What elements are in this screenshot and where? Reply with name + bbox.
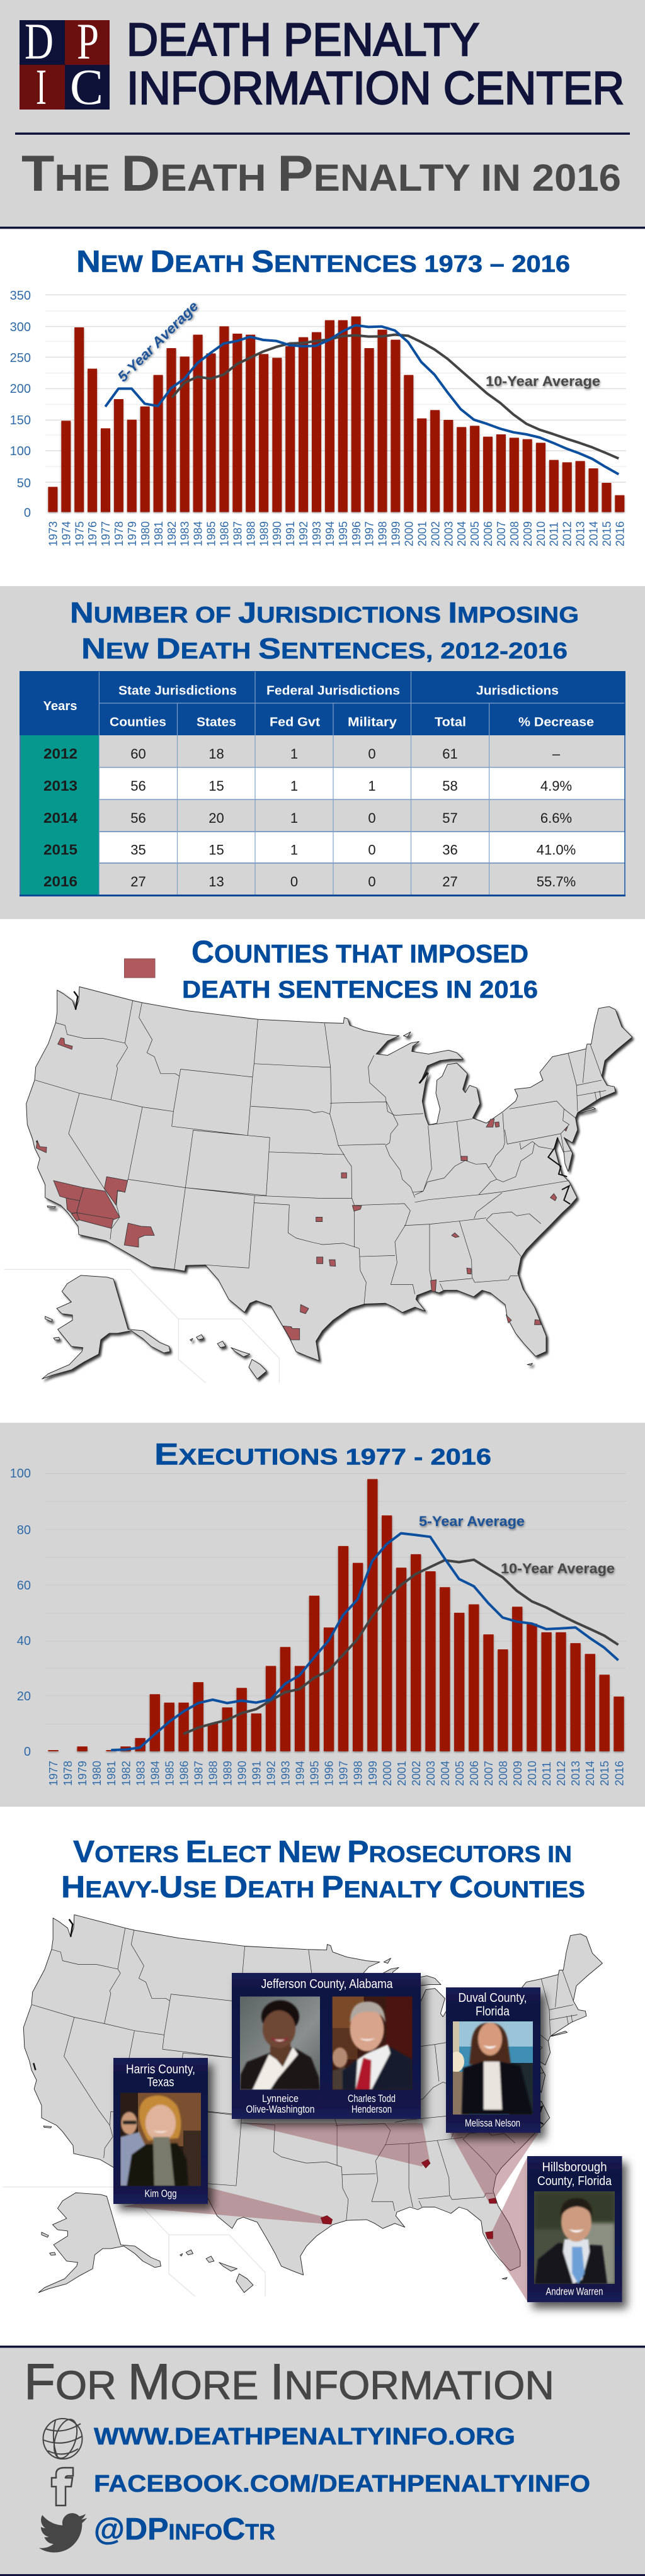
header divider [15, 132, 630, 135]
card: Harris County: Texas [147, 2076, 174, 2089]
x axis year labels: 2010 [535, 521, 547, 546]
table header labels: Total [435, 715, 466, 729]
main title: THE DEATH PENALTY IN 2016 [21, 145, 621, 202]
chart 2 bars [48, 1479, 624, 1751]
x axis year labels: 1999 [390, 521, 402, 546]
x axis year labels: 1988 [244, 521, 257, 546]
label: 5-year average: 5-Year Average [419, 1513, 525, 1529]
row 2014: 2014 [43, 810, 77, 826]
y axis labels: 50 [17, 477, 31, 490]
row 2012: 2012 [43, 745, 77, 762]
x axis year labels: 2005 [454, 1761, 466, 1786]
x axis year labels: 2010 [526, 1761, 539, 1786]
table heading [70, 596, 579, 665]
x axis year labels: 1996 [323, 1761, 336, 1786]
x axis year labels: 2014 [584, 1761, 596, 1786]
card: Duval County [446, 1987, 540, 2133]
organization name [127, 14, 624, 114]
prosecutors heading [61, 1835, 585, 1904]
x axis year labels: 1982 [166, 521, 178, 546]
chart title: EXECUTIONS 1977 - 2016 [154, 1438, 491, 1472]
y axis labels: 0 [24, 506, 31, 520]
row 2013: 4.9% [540, 778, 572, 794]
card: Jefferson County: Charles Todd [348, 2093, 396, 2104]
logo: DPIC: P [77, 13, 99, 70]
logo: DPIC: D [25, 13, 54, 70]
y axis labels [10, 289, 31, 520]
link: website: WWW.DEATHPENALTYINFO.ORG [94, 2424, 515, 2450]
connector: Harris [123, 2188, 329, 2224]
row 2014: 0 [368, 810, 376, 826]
table header labels: Federal Jurisdictions [266, 684, 400, 698]
table header labels: Military [348, 715, 397, 729]
x axis year labels: 1982 [120, 1761, 132, 1786]
table grid [99, 672, 625, 895]
panel: jurisdictions table section [0, 586, 645, 919]
chart 2 plot [45, 1474, 626, 1751]
table border [20, 671, 625, 896]
footer heading: FOR MORE INFORMATION [24, 2354, 554, 2410]
table header labels: % Decrease [518, 715, 594, 729]
table header labels: Jurisdictions [476, 684, 559, 698]
table header labels: Counties [110, 715, 166, 729]
x axis year labels: 2003 [425, 1761, 437, 1786]
y axis labels: 40 [17, 1634, 31, 1648]
footer bottom rule [0, 2574, 645, 2576]
y axis labels: 300 [10, 320, 31, 334]
x axis year labels: 2000 [381, 1761, 394, 1786]
table header labels: State Jurisdictions [118, 684, 237, 698]
x axis year labels: 1984 [192, 521, 205, 546]
panel: footer [0, 2346, 645, 2576]
chart 2 gridlines [45, 1474, 626, 1724]
row 2016: 55.7% [537, 874, 576, 890]
row 2012: 61 [442, 746, 458, 762]
x axis year labels: 2016 [613, 1761, 625, 1786]
x axis year labels: 1974 [60, 521, 72, 546]
row 2013: 1 [368, 778, 376, 794]
connector: Jefferson [243, 2123, 430, 2166]
x axis year labels: 2008 [497, 1761, 510, 1786]
panel: counties map [4, 934, 632, 1383]
x axis year labels: 1996 [350, 521, 363, 546]
county marker: Jefferson [421, 2159, 430, 2168]
card: Hillsborough County: Andrew Warren [545, 2285, 603, 2298]
organization name: INFORMATION CENTER [127, 63, 624, 114]
x axis year labels: 2000 [403, 521, 416, 546]
footer top rule [0, 2346, 645, 2348]
table heading: NEW DEATH SENTENCES, 2012-2016 [81, 632, 568, 665]
x axis year labels: 1981 [152, 521, 165, 546]
row 2012: 18 [208, 746, 224, 762]
logo: DPIC [20, 13, 110, 115]
x axis year labels: 1993 [280, 1761, 292, 1786]
row 2016: 2016 [43, 873, 77, 890]
logo: DPIC: C [70, 60, 103, 115]
x axis year labels: 1995 [309, 1761, 321, 1786]
x axis year labels: 1999 [367, 1761, 379, 1786]
row 2014: 20 [208, 810, 224, 826]
row 2012: – [552, 746, 561, 762]
row 2015: 36 [442, 842, 458, 857]
x axis year labels: 2001 [396, 1761, 408, 1786]
prosecutors heading: HEAVY-USE DEATH PENALTY COUNTIES [61, 1870, 585, 1904]
row 2013: 15 [208, 778, 224, 794]
chart 1 plot [45, 295, 626, 512]
x axis year labels: 2009 [511, 1761, 524, 1786]
row 2012 [43, 745, 561, 762]
table header labels [43, 684, 594, 729]
prosecutors heading: VOTERS ELECT NEW PROSECUTORS IN [73, 1835, 572, 1869]
icon: twitter bird [39, 2513, 87, 2553]
panel: executions chart [0, 1423, 645, 1807]
map of prosecutors counties [3, 1915, 602, 2296]
counties highlighted east [329, 1119, 568, 1325]
row 2015: 41.0% [537, 842, 576, 857]
x axis year labels: 2013 [569, 1761, 582, 1786]
x axis year labels: 1978 [62, 1761, 74, 1786]
x axis year labels: 1997 [338, 1761, 350, 1786]
x axis year labels: 1985 [205, 521, 218, 546]
row 2012: 0 [368, 746, 376, 762]
10-year average line [172, 335, 619, 458]
x axis year labels: 2009 [522, 521, 534, 546]
x axis year labels: 2006 [468, 1761, 481, 1786]
x axis year labels: 1991 [251, 1761, 263, 1786]
x axis year labels: 1993 [311, 521, 323, 546]
x axis year labels: 2008 [508, 521, 521, 546]
table header [20, 671, 625, 735]
row 2013: 56 [130, 778, 146, 794]
x axis year labels: 1984 [149, 1761, 161, 1786]
x axis year labels: 1977 [47, 1761, 60, 1786]
row 2016: 27 [442, 874, 458, 890]
card: Harris County: Harris County, [126, 2062, 195, 2076]
connectors and county markers [123, 2123, 539, 2302]
legend swatch [125, 959, 155, 978]
x axis year labels: 2003 [442, 521, 455, 546]
row 2015: 2015 [43, 841, 77, 857]
y axis labels: 100 [10, 1467, 31, 1481]
row 2012: 60 [130, 746, 146, 762]
x axis year labels: 2016 [614, 521, 626, 546]
x axis year labels: 1992 [297, 521, 310, 546]
x axis year labels: 2011 [548, 522, 561, 546]
icon: globe [43, 2417, 82, 2461]
y axis labels: 20 [17, 1690, 31, 1703]
x axis year labels: 1986 [178, 1761, 190, 1786]
x axis year labels: 2012 [555, 1761, 568, 1786]
state borders [4, 991, 606, 1383]
chart 1 gridlines [45, 295, 626, 482]
y axis labels: 250 [10, 351, 31, 365]
x axis year labels: 1994 [294, 1761, 307, 1786]
row 2015 [43, 841, 576, 857]
x axis year labels: 2015 [601, 521, 614, 546]
x axis year labels: 1989 [258, 521, 270, 546]
card: Jefferson County: Olive-Washington [246, 2103, 315, 2115]
y axis labels: 0 [24, 1745, 31, 1759]
y axis labels: 60 [17, 1579, 31, 1593]
logo: DPIC: I [36, 60, 47, 115]
card: Hillsborough County: Hillsborough [542, 2161, 607, 2174]
section background [0, 1423, 645, 1807]
x axis year labels: 2004 [439, 1761, 452, 1786]
x axis year labels: 1978 [113, 521, 125, 546]
y axis labels: 80 [17, 1523, 31, 1537]
x axis year labels: 1975 [73, 521, 86, 546]
x axis year labels: 2002 [410, 1761, 423, 1786]
table heading: NUMBER OF JURISDICTIONS IMPOSING [70, 596, 579, 629]
row 2016: 0 [368, 874, 376, 890]
x axis year labels: 1981 [105, 1761, 118, 1786]
photo: Charles Todd Henderson [333, 1997, 412, 2090]
photo: Lynneice Olive-Washington [240, 1997, 320, 2090]
y axis labels: 100 [10, 444, 31, 458]
card: Hillsborough County [527, 2156, 622, 2302]
panel: new prosecutors [3, 1835, 622, 2302]
county marker: Harris [321, 2215, 333, 2224]
x axis year labels: 1995 [337, 521, 350, 546]
card: Duval County: Duval County, [459, 1991, 527, 2005]
card: Jefferson County: Jefferson County, Alabama [261, 1977, 393, 1991]
x axis year labels: 1990 [236, 1761, 248, 1786]
row 2012: 1 [290, 746, 298, 762]
x axis year labels: 1973 [47, 521, 59, 546]
y axis labels: 200 [10, 382, 31, 396]
row 2015: 0 [368, 842, 376, 857]
link: facebook: FACEBOOK.COM/DEATHPENALTYINFO [94, 2471, 590, 2497]
x axis year labels: 1983 [179, 521, 191, 546]
photo: Andrew Warren [534, 2191, 615, 2284]
row 2016 [43, 873, 576, 890]
x axis year labels: 2013 [574, 521, 587, 546]
map heading: DEATH SENTENCES IN 2016 [182, 976, 538, 1003]
row 2016: 0 [290, 874, 298, 890]
x axis year labels: 1998 [377, 521, 389, 546]
x axis year labels: 1991 [284, 521, 297, 546]
card: Duval County: Melissa Nelson [465, 2117, 520, 2129]
x axis year labels: 1979 [76, 1761, 89, 1786]
card: Harris County [113, 2058, 208, 2204]
icon: facebook [52, 2468, 73, 2505]
link: twitter: @DPINFOCTR [94, 2512, 275, 2546]
row 2014: 56 [130, 810, 146, 826]
page background: header section [0, 0, 645, 227]
x axis year labels: 1976 [86, 521, 99, 546]
row 2015: 1 [290, 842, 298, 857]
y axis labels: 350 [10, 289, 31, 303]
x axis year labels: 1988 [207, 1761, 219, 1786]
row 2015: 15 [208, 842, 224, 857]
map heading [182, 934, 538, 1003]
x axis year labels: 1986 [218, 521, 231, 546]
x axis year labels: 2012 [561, 521, 574, 546]
row 2016: 27 [130, 874, 146, 890]
x axis year labels [47, 521, 626, 546]
x axis year labels: 2007 [482, 1761, 495, 1786]
x axis year labels: 1992 [265, 1761, 278, 1786]
row 2014: 57 [442, 810, 458, 826]
table body rows [21, 735, 625, 895]
row 2014: 1 [290, 810, 298, 826]
connector: Hillsborough [488, 2157, 527, 2302]
card: Jefferson County [232, 1973, 421, 2119]
x axis year labels: 1997 [363, 521, 376, 546]
x axis year labels: 2015 [598, 1761, 611, 1786]
row 2013: 58 [442, 778, 458, 794]
5-year average line [111, 1534, 619, 1750]
footer background [0, 2346, 645, 2576]
organization name: DEATH PENALTY [127, 14, 479, 65]
x axis year labels: 1983 [134, 1761, 147, 1786]
chart title: NEW DEATH SENTENCES 1973 – 2016 [76, 245, 570, 279]
x axis year labels: 1998 [352, 1761, 365, 1786]
x axis year labels: 1994 [324, 521, 336, 546]
county marker: Hillsborough [486, 2231, 493, 2239]
x axis year labels: 1987 [231, 521, 244, 546]
table header labels: Years [43, 699, 77, 713]
x axis year labels: 1979 [126, 521, 139, 546]
5-year average line [105, 325, 619, 474]
row 2014: 6.6% [540, 810, 572, 826]
row 2015: 35 [130, 842, 146, 857]
row 2013: 1 [290, 778, 298, 794]
panel: new death sentences chart [10, 245, 626, 546]
label: 10-year average: 10-Year Average [501, 1561, 615, 1576]
x axis year labels: 2002 [429, 521, 442, 546]
row 2013: 2013 [43, 777, 77, 794]
section background [0, 586, 645, 919]
row 2016: 13 [208, 874, 224, 890]
card: Duval County: Florida [476, 2004, 510, 2018]
connector: Duval [450, 2133, 539, 2203]
chart 1 bars [48, 317, 624, 512]
x axis year labels: 1990 [271, 521, 283, 546]
label: 10-year average: 10-Year Average [486, 373, 600, 389]
x axis year labels: 1985 [163, 1761, 176, 1786]
x axis year labels: 2006 [482, 521, 494, 546]
y axis labels: 150 [10, 414, 31, 427]
x axis year labels: 2005 [469, 521, 481, 546]
x axis year labels: 2007 [495, 521, 508, 546]
photo: Kim Ogg [120, 2093, 201, 2186]
header rule bottom [0, 227, 645, 229]
table header labels: Fed Gvt [270, 715, 320, 729]
county marker: Duval [489, 2198, 496, 2203]
card: Hillsborough County: County, Florida [537, 2174, 612, 2188]
map land [26, 986, 632, 1379]
row 2013 [43, 777, 572, 794]
x axis year labels: 2004 [455, 521, 468, 546]
x axis year labels: 1980 [91, 1761, 103, 1786]
x axis year labels: 2014 [587, 521, 600, 546]
x axis year labels: 2001 [416, 521, 428, 546]
x axis year labels: 1980 [139, 521, 152, 546]
table [20, 671, 625, 896]
map of counties [4, 986, 632, 1383]
table header labels: States [197, 715, 236, 729]
x axis year labels: 1987 [192, 1761, 205, 1786]
map heading: COUNTIES THAT IMPOSED [191, 934, 528, 969]
x axis year labels: 2011 [540, 1761, 553, 1786]
x axis year labels: 1989 [222, 1761, 234, 1786]
card: Harris County: Kim Ogg [145, 2188, 176, 2200]
card: Jefferson County: Henderson [351, 2103, 392, 2115]
row 2014 [43, 810, 572, 826]
label: 5-year average: 5-Year Average [115, 298, 202, 385]
x axis year labels: 1977 [100, 521, 112, 546]
y axis labels [10, 1467, 31, 1759]
photo: Melissa Nelson [453, 2021, 533, 2115]
x axis year labels [47, 1761, 625, 1786]
10-year average line [183, 1560, 619, 1734]
counties highlighted west [36, 1038, 323, 1340]
card: Jefferson County: Lynneice [262, 2093, 299, 2104]
